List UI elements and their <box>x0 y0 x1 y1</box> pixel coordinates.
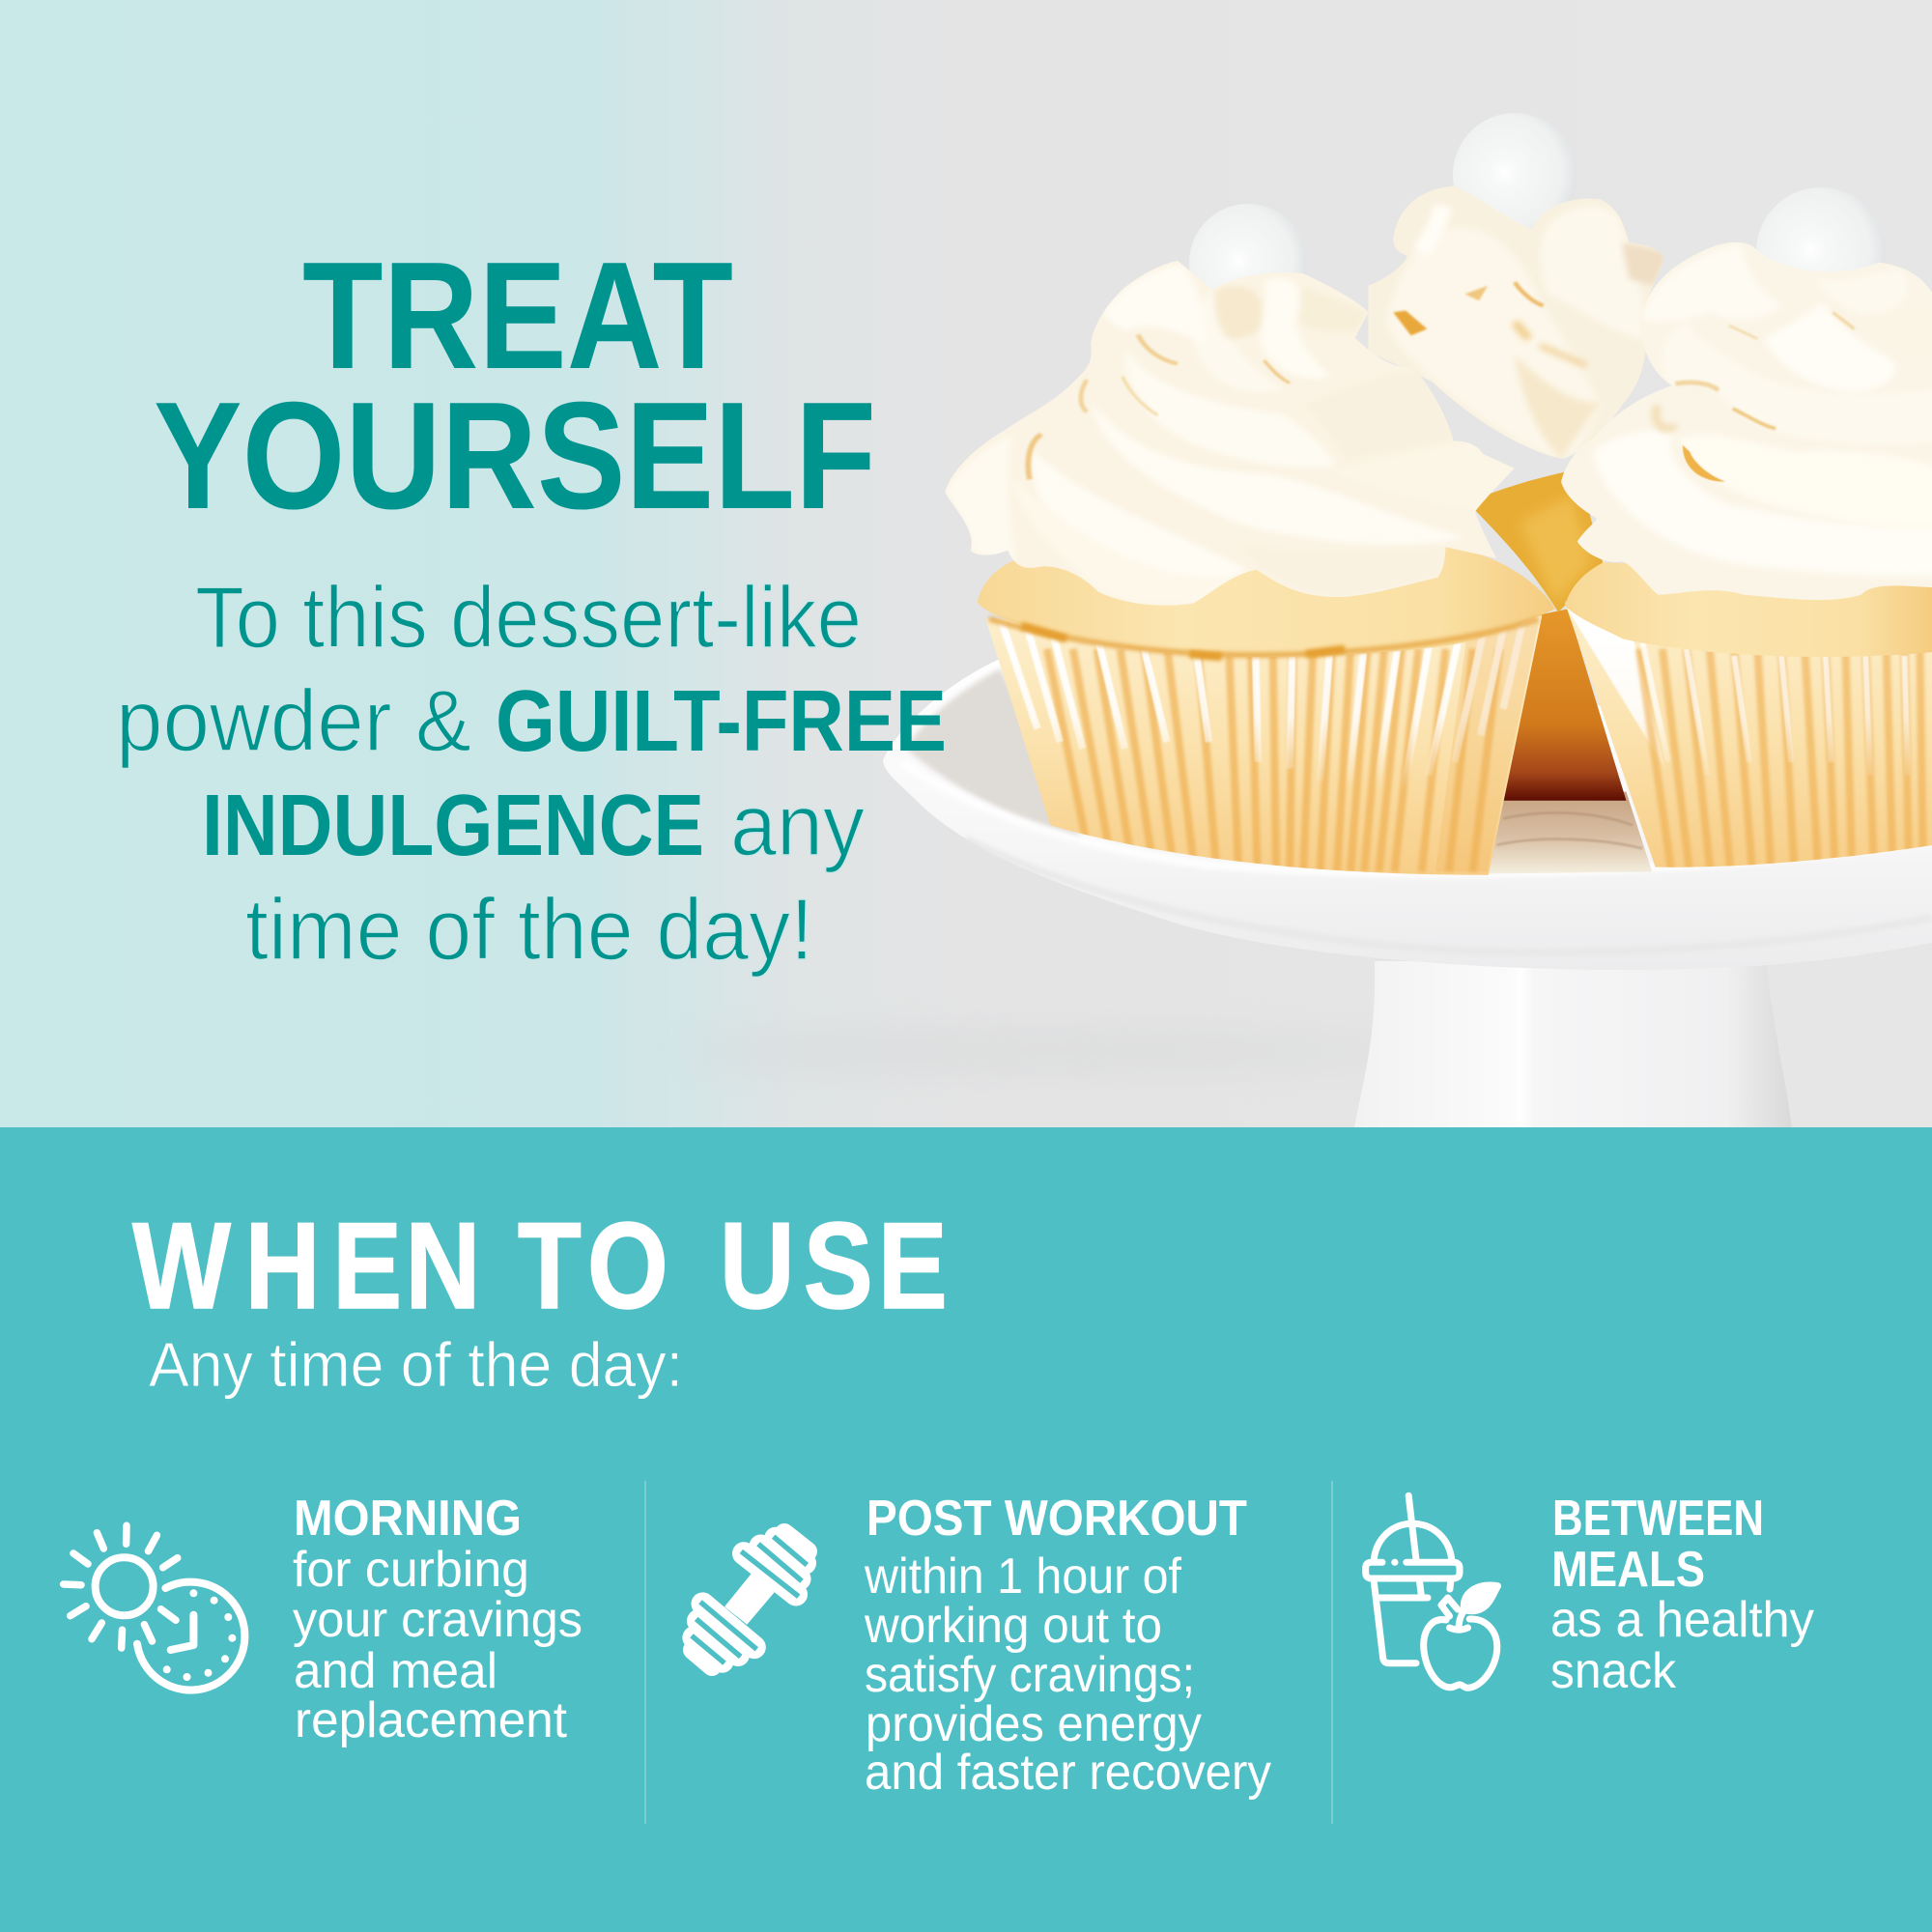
heading: WHEN TO USE: TO <box>518 1197 668 1334</box>
item: post workout: satisfy cravings; <box>865 1647 1195 1703</box>
left cupcake wrapper with pleats <box>982 609 1551 882</box>
item: post workout: working out to <box>864 1598 1162 1654</box>
plate <box>883 660 1932 970</box>
panel: when to use <box>0 1127 1932 1932</box>
heading: WHEN TO USE <box>132 1197 948 1334</box>
back cupcake frosting <box>1365 180 1672 466</box>
item: between meals: MEALS <box>1551 1542 1705 1598</box>
cupcakes: bases and frosting <box>941 113 1932 882</box>
lede text: time of the day! <box>245 882 813 979</box>
item: post workout: within 1 hour of <box>864 1548 1182 1605</box>
back cupcake pearl <box>1453 113 1577 237</box>
hero background <box>0 0 1932 1128</box>
lede text: GUILT-FREE <box>496 673 947 770</box>
right cupcake wrapper <box>1558 596 1932 875</box>
item: between meals <box>1550 1491 1814 1699</box>
subheading: Any time of the day: <box>149 1329 683 1400</box>
item: between meals: BETWEEN <box>1552 1491 1764 1547</box>
photo: cupcakes on a white stand <box>686 660 1932 1128</box>
item: morning: and meal <box>294 1643 497 1699</box>
item: morning: replacement <box>295 1692 568 1748</box>
right cake top <box>1565 562 1932 657</box>
heading: WHEN TO USE: WHEN <box>132 1197 480 1334</box>
lede text: INDULGENCE <box>202 778 704 874</box>
lede text: powder & <box>116 673 471 770</box>
stand pedestal <box>1354 961 1792 1128</box>
icon: sun and clock <box>64 1525 244 1690</box>
item: post workout <box>864 1491 1271 1801</box>
item: post workout: provides energy <box>866 1696 1202 1752</box>
headline: TREAT YOURSELF: YOURSELF <box>154 371 876 541</box>
icon: smoothie cup and apple <box>1366 1495 1497 1688</box>
item: between meals: snack <box>1550 1643 1677 1699</box>
lede text: any <box>730 778 865 874</box>
right cupcake pearl <box>1756 187 1886 317</box>
plate reflection between cupcakes <box>1487 792 1652 874</box>
item: morning <box>293 1491 582 1748</box>
left cupcake frosting <box>941 258 1520 611</box>
lede text: To this dessert-like <box>195 570 862 667</box>
headline: TREAT YOURSELF: TREAT <box>302 231 733 401</box>
item: between meals: as a healthy <box>1550 1592 1814 1648</box>
item: post workout: POST WORKOUT <box>867 1491 1247 1547</box>
stand shadow <box>686 1030 1401 1072</box>
item: post workout: and faster recovery <box>865 1745 1271 1801</box>
item: morning: for curbing <box>293 1542 529 1598</box>
lede text <box>116 570 947 979</box>
icon: dumbbell <box>692 1533 808 1666</box>
headline: TREAT YOURSELF <box>154 231 876 541</box>
left cake top <box>978 546 1555 657</box>
item: morning: your cravings <box>293 1592 582 1648</box>
left cupcake pearl <box>1189 204 1307 322</box>
item: morning: MORNING <box>294 1491 522 1547</box>
right cupcake frosting <box>1557 236 1932 605</box>
heading: WHEN TO USE: USE <box>720 1197 948 1334</box>
back cupcake base <box>1467 469 1626 801</box>
